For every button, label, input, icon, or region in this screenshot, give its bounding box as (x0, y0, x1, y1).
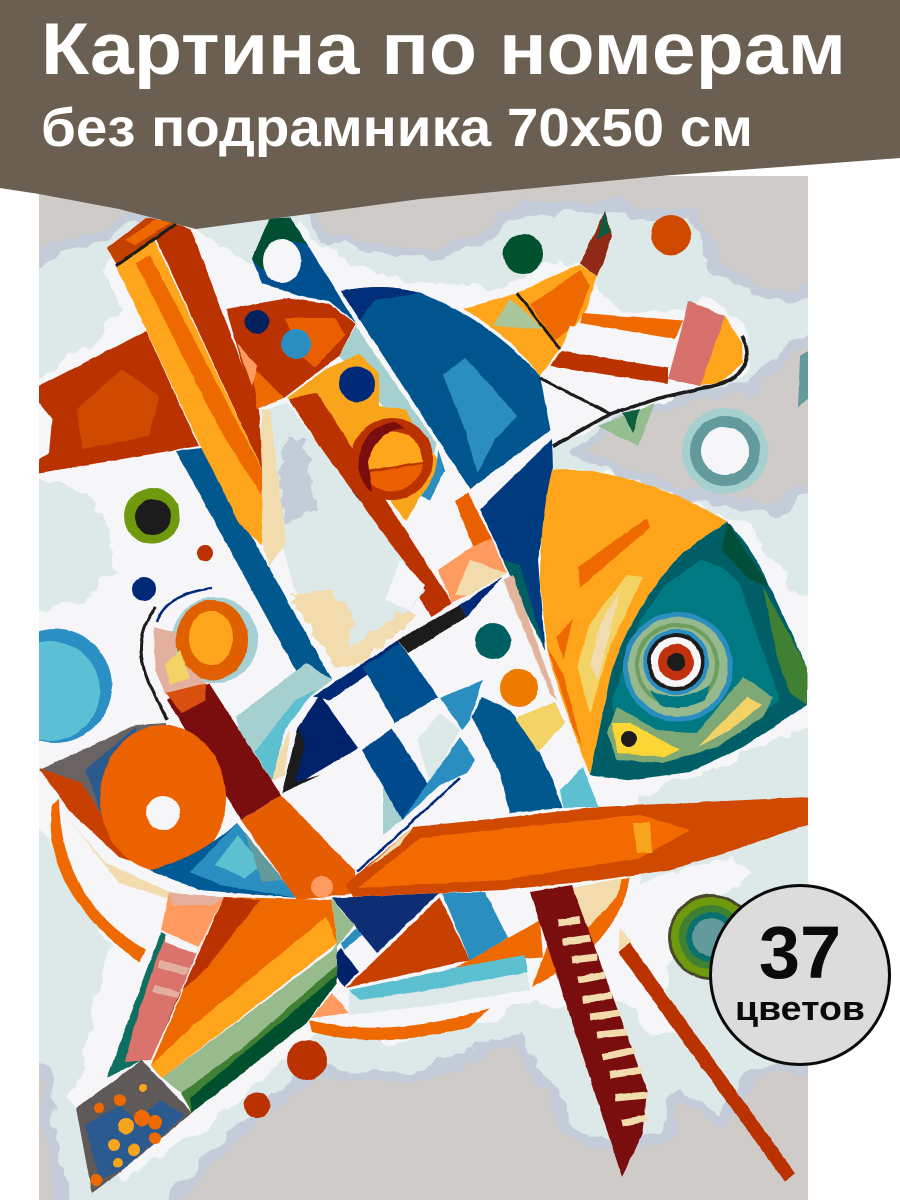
speckled square (76, 1060, 192, 1193)
white ring right (682, 408, 768, 494)
grey and cream paint patches (256, 409, 425, 668)
lower centre panels (311, 892, 530, 1018)
ladder bar (530, 878, 647, 1177)
pale blue strip (560, 767, 598, 808)
right stripes shape (540, 301, 747, 446)
badge: 37 colours (710, 886, 890, 1064)
lower red dots (244, 1040, 327, 1118)
peach patch (154, 627, 206, 695)
red diagonal (289, 393, 452, 617)
green sliver by navy triangle (327, 898, 355, 958)
title: Картина по номерам (41, 9, 846, 90)
painting: abstract composition (0, 176, 830, 1200)
orange ring (141, 588, 258, 720)
large fish (540, 470, 807, 780)
top-left bar (107, 218, 262, 546)
green circle right (668, 894, 754, 980)
top dots (503, 215, 691, 274)
artwork shapes (0, 211, 815, 1193)
top horn (463, 211, 612, 376)
large orange bar (345, 797, 815, 897)
orange and peach stripe (438, 493, 557, 700)
left dots (124, 488, 213, 601)
big orange wedge and green band (151, 893, 337, 1113)
right edge sliver (798, 351, 808, 408)
blue arc (472, 697, 562, 813)
dark blue triangle (480, 439, 553, 650)
ring with yellow centre (351, 418, 445, 500)
badge: 37 colours: цветов (735, 990, 865, 1028)
dark red bar (166, 683, 281, 820)
blue diagonal stripe (176, 448, 332, 695)
badge: 37 colours: 37 (759, 911, 841, 994)
painted background washes (10, 205, 830, 1200)
orange fish head (226, 298, 356, 409)
thin red diagonal (618, 927, 795, 1182)
centre dots (475, 623, 538, 707)
blue circle left (39, 628, 112, 743)
lower orange ring arcs (51, 798, 630, 1040)
navy dot (339, 366, 375, 402)
blue ring shape (252, 218, 436, 470)
subtitle: без подрамника 70х50 см (41, 98, 753, 158)
central dark dots (352, 490, 359, 500)
blue semicircle (341, 287, 552, 489)
blue triangle (149, 823, 297, 898)
red-orange wedge (39, 331, 199, 473)
header banner (0, 0, 900, 229)
grey wing and orange disc (39, 723, 226, 900)
orange wedge centre (241, 795, 359, 900)
yellow patch (515, 702, 565, 752)
pale blue wash (236, 663, 332, 780)
pale wash in middle (266, 403, 425, 650)
left slim stripe (107, 932, 199, 1078)
yellow blob with navy dot (287, 354, 445, 521)
green triangle (598, 403, 655, 446)
checker band (282, 577, 502, 872)
